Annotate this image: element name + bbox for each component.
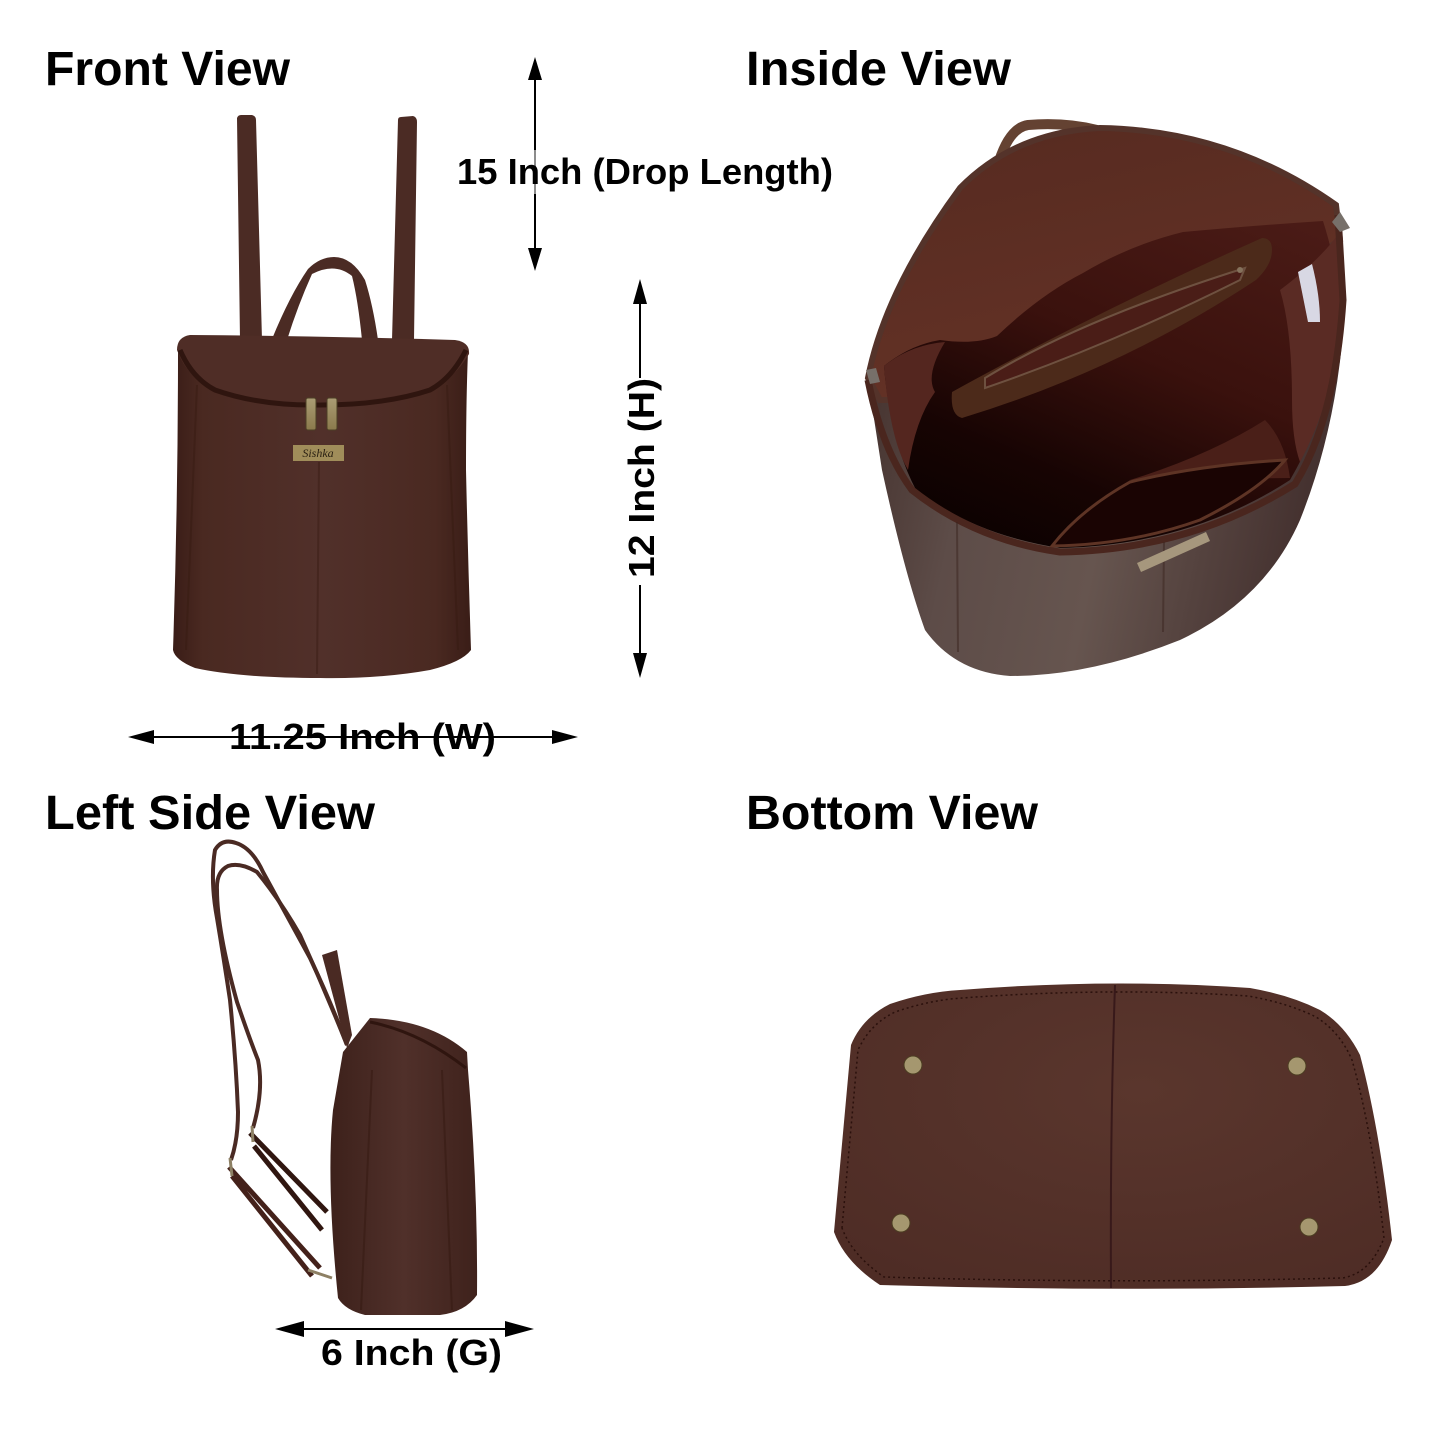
dimension: height: 12 Inch (H) (621, 378, 662, 578)
care label (1298, 264, 1320, 322)
shoulder straps (237, 115, 417, 340)
top zipper (370, 1022, 466, 1068)
inside view backpack (866, 124, 1350, 676)
short tab (322, 950, 352, 1048)
top handle (272, 257, 378, 340)
lower inner pocket (1052, 460, 1285, 546)
exterior shell (868, 215, 1345, 676)
dimension: drop length (457, 57, 833, 271)
brand plate (293, 445, 344, 461)
cavity (884, 221, 1340, 548)
arrow: width (128, 730, 578, 744)
bag body (330, 1018, 477, 1315)
rivets (892, 1056, 1318, 1236)
dimension: height (621, 279, 662, 678)
body seams (361, 1070, 452, 1310)
top handle (997, 124, 1097, 168)
front view backpack (173, 115, 471, 678)
title: Bottom View: Bottom View (746, 787, 1039, 840)
dimension: gusset (275, 1321, 534, 1373)
brand plate (1137, 532, 1210, 572)
left fabric fold (884, 342, 945, 470)
dimension: drop length: 15 Inch (Drop Length) (457, 151, 833, 192)
leather base (834, 983, 1392, 1289)
bag body (173, 352, 471, 678)
side and center seams (186, 385, 458, 674)
lower straps (229, 1133, 327, 1276)
long straps (213, 842, 347, 1160)
arrow: gusset (275, 1321, 534, 1337)
bag flap (177, 335, 469, 402)
floor of the bag (1130, 420, 1290, 480)
exterior seams (957, 522, 1164, 652)
right lining panel (1280, 232, 1344, 462)
center seam (1111, 985, 1115, 1288)
stitching (842, 992, 1384, 1281)
brand plate: Sishka (302, 446, 334, 460)
arrow: height (633, 279, 647, 678)
inner zip pocket (952, 238, 1272, 418)
buckles (230, 1126, 332, 1278)
dimension: gusset: 6 Inch (G) (321, 1332, 502, 1373)
front rim zipper (868, 215, 1343, 552)
arrow: drop length (528, 57, 542, 271)
left side view backpack (213, 842, 477, 1315)
dimension: width (128, 716, 578, 757)
title: Left Side View: Left Side View (45, 787, 376, 840)
title: Front View: Front View (45, 43, 291, 96)
bottom view panel (834, 983, 1392, 1289)
back lining panel with rim (868, 128, 1340, 400)
zipper pulls (306, 398, 337, 430)
dimension: width: 11.25 Inch (W) (229, 716, 496, 757)
title: Inside View: Inside View (746, 43, 1012, 96)
zipper ends (866, 212, 1350, 384)
